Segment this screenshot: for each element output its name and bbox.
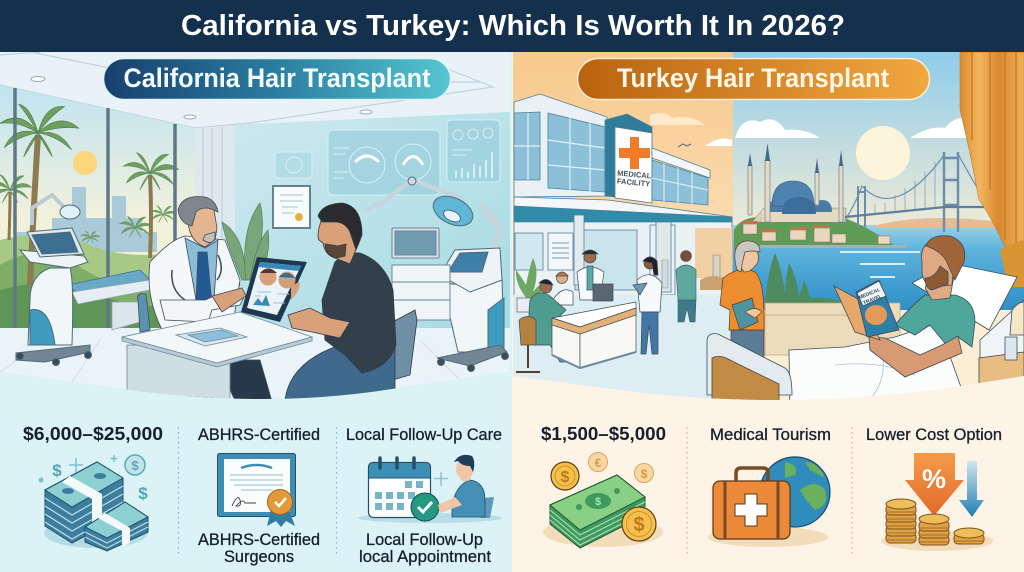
exam table [68,270,152,330]
stat: Turkey medical tourism [708,425,831,547]
standing doctor [633,257,662,354]
icon: certificate [218,454,296,527]
facility sign text: FACILITY [617,177,651,188]
icon: money and coins: € [595,456,602,470]
right equipment cart with lamp [365,177,508,372]
pill heading: California [104,58,450,100]
wall monitor and cabinet [392,228,450,320]
icon: money and coins: $ [641,467,648,481]
sea sparkle and cypress trees [765,252,920,303]
caption: Local Follow-Up [366,530,483,549]
panel: Turkey scene [513,52,1024,412]
icon: stacks of cash: $ [131,458,139,473]
panel: California clinic scene [0,52,512,412]
bed rail [707,334,792,395]
desk [122,312,314,398]
stat: California cost [23,424,163,551]
window sill [765,303,900,355]
icon: calendar and person [358,455,502,523]
suspension bridge [845,152,985,232]
facility sign text [617,170,651,186]
icon: medical case and globe [708,457,830,547]
curtain [195,125,235,265]
left background [0,52,512,572]
icon: down arrows and coin stacks: % [922,464,946,494]
stat: Turkey cost: $1,500–$5,000 [541,424,666,444]
column dividers [178,427,852,555]
icon: stacks of cash [38,455,148,551]
doctor [138,197,275,412]
pill heading: Turkey: Turkey Hair Transplant [617,63,889,93]
patient [285,203,417,412]
icon: money and coins: $ [633,514,645,536]
floor [0,328,510,399]
holographic displays [275,120,500,195]
plant [222,203,269,288]
caption [359,530,491,566]
stat: Turkey cost [541,424,666,548]
facility sign text: MEDICAL [617,169,652,181]
framed certificate [273,186,310,228]
neck and head [925,270,955,300]
woman visitor [720,241,764,360]
brochure [834,286,880,340]
floor [513,295,731,398]
sea [733,225,1024,310]
right background [512,52,1024,572]
stat: Turkey medical tourism: Medical Tourism [710,425,831,444]
caption: local Appointment [359,547,491,566]
stat: California follow-up care [346,425,502,566]
stat: California certification: ABHRS-Certified [198,425,320,444]
header bar [0,0,1024,52]
stat: California certification [198,425,320,566]
blanket [788,326,961,400]
pill heading: Turkey [578,58,930,100]
tablet [241,257,307,322]
sun and clouds [650,113,985,180]
curtain and window frame [960,52,1024,287]
title: California vs Turkey: Which Is Worth It In 2026? [181,10,845,42]
icon: stacks of cash: $ [138,484,148,503]
stat: California cost: $6,000–$25,000 [23,424,163,444]
caption: Surgeons [224,547,294,566]
window with view [0,85,195,330]
bed and patient [707,236,1024,412]
bedside [978,352,1024,384]
caption [198,530,320,566]
island with mosque [734,143,908,250]
icon: money and coins: $ [595,496,601,508]
reception desk and staff [516,250,636,372]
icon: money and coins [543,452,663,548]
pill heading: California: California Hair Transplant [124,63,431,93]
plant [516,258,542,298]
medical facility building [514,94,732,300]
bed and patient: TRAVEL [862,294,883,307]
caption: ABHRS-Certified [198,530,320,549]
icon: money and coins: $ [561,469,570,486]
stat: California follow-up care: Local Follow-Up Care [346,425,502,444]
arms [869,336,962,377]
bed and patient: MEDICAL [858,287,881,301]
stat: Turkey lower cost: Lower Cost Option [866,425,1002,444]
left equipment cart [16,195,92,366]
icon: stacks of cash: $ [52,461,62,480]
nurse in teal [662,250,728,322]
shirt [895,295,975,352]
ceiling [0,52,510,128]
facility sign cross [619,137,650,169]
stat: Turkey lower cost [866,425,1002,551]
